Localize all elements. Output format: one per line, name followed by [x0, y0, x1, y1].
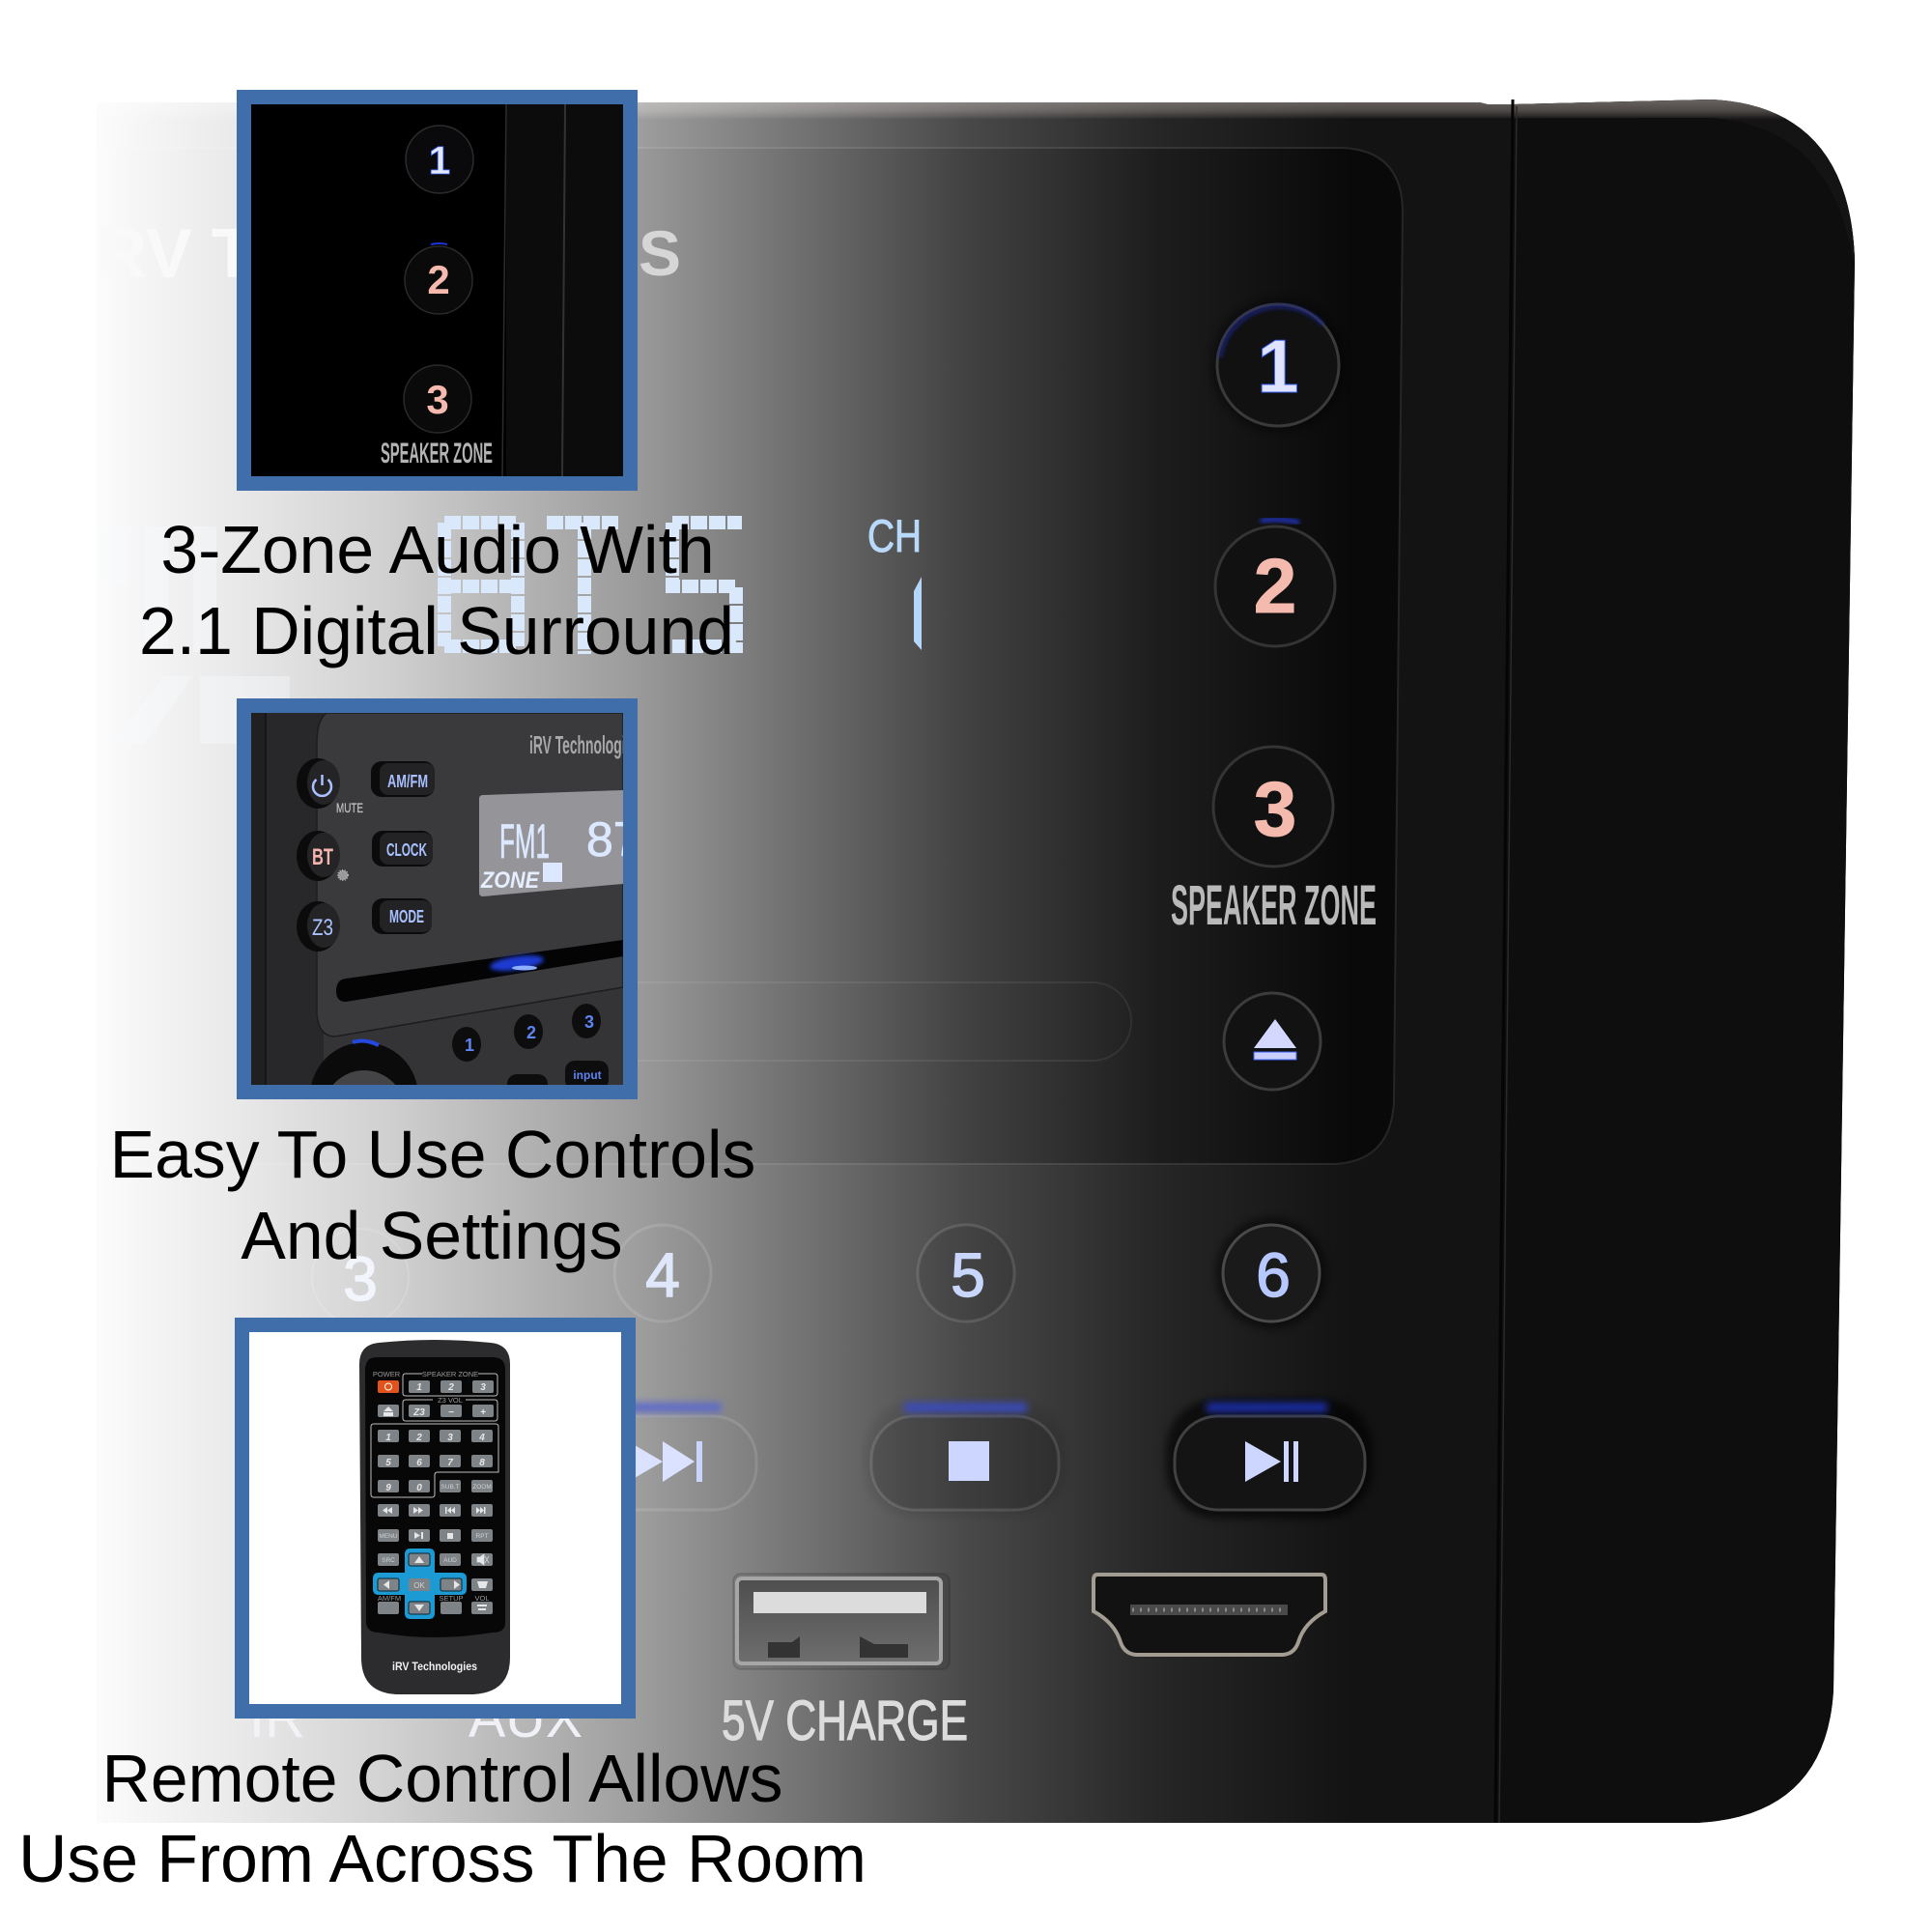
inset: speaker zone close-up — [237, 90, 638, 491]
volume knob — [311, 1039, 417, 1085]
button: speaker zone 1 — [1210, 298, 1346, 433]
inset button 1: 1 — [429, 138, 450, 183]
button: stop — [865, 1403, 1065, 1517]
button: BT — [297, 831, 340, 881]
remote d-pad — [373, 1548, 467, 1619]
icon: brightness — [338, 870, 348, 880]
button: number 5: 5 — [951, 1240, 985, 1310]
cd slot — [336, 940, 623, 1002]
inset button 3: 3 — [426, 377, 449, 422]
disc slot — [483, 982, 1131, 1061]
lcd screen: FM1 — [499, 814, 550, 868]
inset: controls close-up — [237, 698, 638, 1099]
remote button labels: 7 — [447, 1458, 453, 1468]
button: eject — [1224, 993, 1321, 1090]
remote small labels: OK — [413, 1581, 425, 1590]
caption: remote control — [18, 1741, 867, 1896]
caption: 3-zone audio — [139, 512, 734, 668]
port: USB — [733, 1574, 950, 1669]
remote button labels: 4 — [478, 1433, 485, 1443]
text: SPEAKER ZONE — [1171, 874, 1377, 937]
remote button labels: 1 — [416, 1382, 422, 1393]
remote labels: SETUP — [439, 1594, 464, 1603]
remote small labels — [379, 1484, 492, 1590]
caption: easy controls: Easy To Use Controls — [110, 1117, 755, 1192]
display: channel label — [867, 510, 922, 650]
remote button labels: 3 — [480, 1382, 486, 1393]
lower buttons: input — [573, 1068, 602, 1082]
caption: easy controls — [110, 1117, 755, 1273]
label: IR and AUX ports: AUX — [469, 1687, 582, 1749]
label: IR and AUX ports: IR — [249, 1687, 305, 1749]
remote button labels: 8 — [479, 1458, 485, 1468]
button: AM/FM: AM/FM — [387, 772, 428, 791]
button: mode — [372, 898, 432, 934]
remote button labels: 3 — [447, 1433, 453, 1443]
display: faded band digits — [101, 526, 290, 744]
label: IR and AUX ports — [249, 1687, 582, 1749]
brand lettering: S — [639, 217, 681, 289]
remote button labels: 0 — [416, 1483, 422, 1493]
button: speaker zone 2 — [1215, 520, 1335, 646]
inset: remote control — [235, 1318, 636, 1719]
remote small labels: ZOOM — [472, 1484, 492, 1491]
panel: recessed faceplate — [97, 148, 1403, 1164]
button: speaker zone 3: 3 — [1254, 766, 1296, 852]
caption: 3-zone audio: 3-Zone Audio With — [160, 512, 715, 587]
label: mute: MUTE — [336, 800, 363, 815]
button: power — [297, 758, 340, 809]
lower buttons — [507, 1061, 609, 1085]
inset: speaker zone close-up: SPEAKER ZONE — [381, 438, 493, 469]
remote button labels: 1 — [385, 1433, 391, 1443]
label: 5V charge: 5V CHARGE — [722, 1690, 968, 1752]
button: number 5 — [918, 1225, 1014, 1321]
button: play pause — [1166, 1399, 1373, 1519]
brand lettering — [97, 215, 681, 293]
caption: 3-zone audio: 2.1 Digital Surround — [139, 593, 734, 668]
remote button labels: 6 — [416, 1458, 422, 1468]
remote body — [359, 1340, 510, 1694]
button: speaker zone 2: 2 — [1254, 543, 1296, 629]
inset button 1 — [406, 126, 473, 193]
remote labels: POWER — [373, 1370, 401, 1378]
brand lettering: RV T — [97, 215, 254, 293]
button: Z3 — [297, 901, 340, 952]
display: frequency digits — [444, 523, 742, 654]
button: speaker zone 3 — [1213, 747, 1333, 867]
inset button 3 — [404, 365, 471, 433]
lcd screen: ZONE — [480, 867, 540, 894]
caption: remote control: Remote Control Allows — [102, 1741, 782, 1816]
remote buttons — [378, 1380, 494, 1614]
number buttons: 3 — [584, 1012, 594, 1032]
display: channel label: CH — [867, 510, 922, 561]
remote brand: iRV Technologies — [392, 1660, 477, 1673]
remote icons — [383, 1383, 489, 1611]
remote button labels: − — [448, 1407, 454, 1418]
number buttons: 2 — [526, 1023, 536, 1042]
button: clock: CLOCK — [386, 840, 427, 860]
button: number 4: 4 — [645, 1240, 680, 1310]
remote button labels: + — [480, 1407, 486, 1418]
caption: remote control: Use From Across The Room — [18, 1821, 867, 1896]
button: number 3 — [312, 1229, 409, 1325]
button: BT: BT — [312, 844, 333, 870]
button: AM/FM — [371, 761, 435, 797]
remote faceplate — [365, 1357, 505, 1637]
remote button labels: 2 — [447, 1382, 454, 1393]
caption: easy controls: And Settings — [241, 1198, 623, 1273]
remote button labels: 9 — [385, 1483, 391, 1493]
remote small labels: SRC — [382, 1557, 395, 1564]
port: HDMI — [1094, 1575, 1325, 1655]
inset button 2: 2 — [427, 257, 450, 302]
remote button labels: 5 — [385, 1458, 391, 1468]
remote outlines — [371, 1374, 498, 1497]
button: speaker zone 1: 1 — [1257, 324, 1299, 409]
button: number 3: 3 — [343, 1244, 378, 1314]
remote small labels: RPT — [475, 1533, 489, 1540]
button: number 6: 6 — [1256, 1240, 1291, 1310]
remote labels — [373, 1370, 490, 1603]
remote button labels: Z3 — [412, 1407, 425, 1418]
remote labels: Z3 VOL — [438, 1396, 463, 1405]
number buttons: 1 — [465, 1036, 474, 1055]
button: clock — [372, 831, 433, 867]
remote small labels: MENU — [379, 1533, 398, 1540]
button: number 6 — [1215, 1217, 1327, 1329]
remote button labels — [385, 1382, 486, 1493]
remote labels: AM/FM — [378, 1594, 401, 1603]
lcd screen: 87 — [586, 812, 640, 867]
inset button 2 — [405, 243, 472, 314]
number buttons — [452, 1004, 601, 1062]
remote labels: VOL — [474, 1594, 490, 1603]
button: number 4 — [614, 1225, 711, 1321]
button: Z3: Z3 — [312, 915, 333, 941]
remote labels: SPEAKER ZONE — [422, 1370, 478, 1378]
button: mode: MODE — [389, 907, 424, 926]
button: next track — [569, 1403, 756, 1510]
remote small labels: AUD — [443, 1557, 457, 1564]
brand: iRV Technologies — [529, 730, 640, 759]
remote button labels: 2 — [415, 1433, 422, 1443]
remote small labels: SUB.T — [440, 1484, 460, 1491]
lcd screen — [479, 790, 623, 896]
